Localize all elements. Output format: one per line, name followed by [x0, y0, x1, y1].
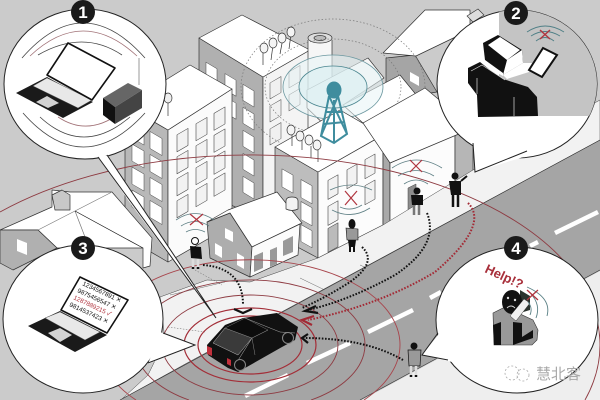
icon: car: [207, 313, 298, 372]
wifi signal: central block: [330, 185, 372, 215]
number list: 1234567891 ✕: [81, 280, 122, 305]
signal arcs: [22, 23, 145, 147]
person C: [411, 188, 423, 215]
phone: [529, 48, 557, 77]
icon: satellite dishes on tall tower: [260, 27, 295, 65]
building: receding peaked roofs: [307, 58, 440, 130]
arrow: dotted path from person C to car: [308, 213, 430, 310]
icon: rooftop dishes on central block: [287, 125, 321, 162]
arrowheads: [234, 306, 318, 343]
building: left apartment block: [125, 65, 232, 262]
person body: [468, 62, 538, 117]
person D: [449, 172, 467, 207]
badge 3: [71, 236, 95, 260]
number list: [68, 280, 122, 326]
wifi signal: right block: [392, 160, 442, 184]
building: back house: [383, 9, 484, 100]
arrow: dotted path from person E to car: [304, 338, 403, 360]
building: smokestack: [308, 33, 332, 135]
house: lower centre: [207, 192, 302, 277]
arrow: dotted path from person A to car: [203, 265, 243, 305]
person E: [408, 342, 421, 377]
callout bubble 1: laptop and router: [4, 9, 216, 318]
wifi blocked: [527, 287, 548, 318]
sidewalk: [122, 100, 600, 399]
building: right shop block: [363, 88, 473, 226]
number list: 1287889215 ✓: [72, 294, 113, 318]
badge 2: [504, 1, 528, 25]
number list: 9814537423 ✕: [68, 301, 109, 326]
laptop: [16, 43, 115, 118]
building: central block: [275, 110, 383, 258]
callout bubble 3: laptop with numbers: [3, 245, 196, 393]
house: left: [0, 190, 152, 270]
road: [120, 140, 600, 400]
router: [103, 58, 142, 124]
badge 1: [71, 0, 95, 24]
number list: 9875456547 ✕: [76, 287, 117, 312]
laptop: [28, 277, 128, 352]
building: tall back tower: [199, 15, 310, 220]
arrow: dotted path from person B to car: [302, 247, 368, 308]
head: [502, 290, 522, 314]
callout bubble 4: person calling for help: [422, 247, 598, 393]
watermark: [505, 366, 581, 383]
person head: [483, 35, 532, 79]
icon: cell tower: [321, 82, 347, 143]
body: [493, 307, 538, 345]
shoulder highlights: [471, 65, 514, 116]
road edges: [120, 140, 600, 400]
wifi blocked: [527, 26, 564, 41]
badge 4: [504, 236, 528, 260]
watermark: 慧北客: [536, 366, 581, 383]
lane markings: [245, 212, 598, 396]
arrow: red dotted path from person D to car: [308, 203, 474, 320]
grey panel: [499, 8, 599, 116]
help text: Help!?: [483, 261, 526, 292]
sidewalk paving lines: [168, 265, 400, 332]
phone: [510, 299, 530, 321]
badge 1: 1: [78, 3, 88, 22]
badge 3: 3: [78, 239, 88, 258]
signal rings around cell tower: [241, 19, 425, 155]
person A: [190, 238, 202, 269]
sidewalk corner: [362, 271, 600, 400]
signal rings around car: [0, 155, 600, 400]
badge 4: 4: [511, 239, 521, 258]
hair: [520, 290, 530, 313]
callout bubble 2: person with phone: [437, 8, 599, 172]
person B: [346, 219, 358, 252]
badge 2: 2: [511, 4, 521, 23]
wifi signal: person A: [176, 214, 214, 232]
